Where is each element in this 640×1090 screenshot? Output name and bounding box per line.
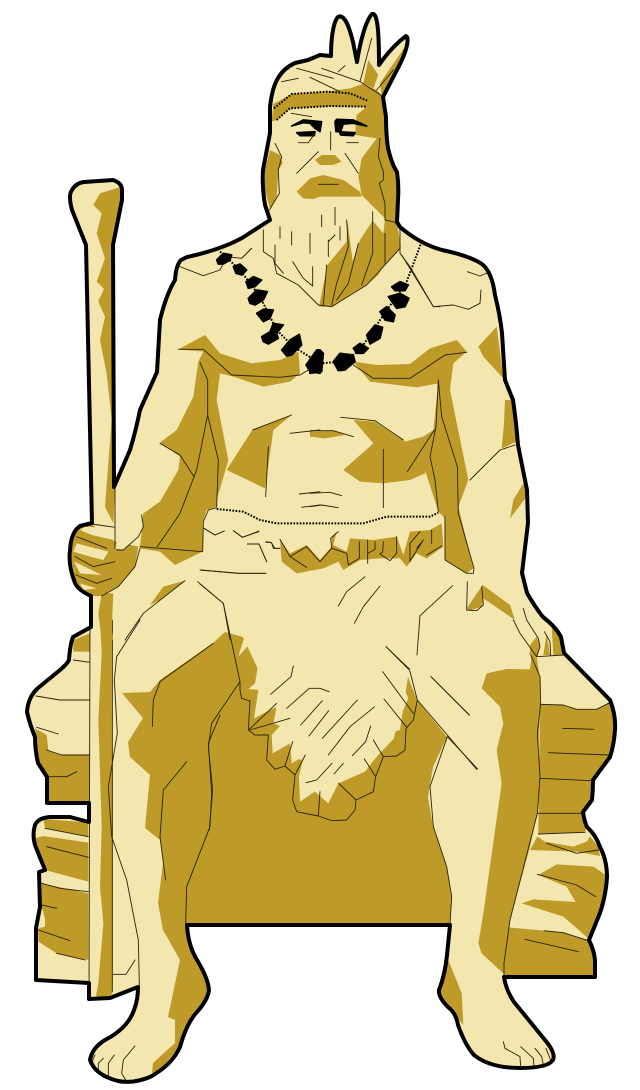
seat and left leg shadow	[122, 632, 452, 1073]
torso left, arm and hand	[70, 240, 320, 640]
staff head shading	[93, 187, 122, 300]
left leg, staff and throne	[35, 620, 220, 1082]
waist cord dotted line	[217, 509, 438, 523]
right-hand fist gripping staff	[70, 487, 143, 596]
necklace right strand	[310, 242, 422, 373]
necklace left strand	[217, 252, 320, 373]
head with headdress, face and beard	[227, 38, 440, 307]
loincloth	[200, 523, 477, 830]
torso right, arm and hand on throne	[310, 255, 563, 669]
right leg and throne shadow	[430, 653, 615, 1067]
